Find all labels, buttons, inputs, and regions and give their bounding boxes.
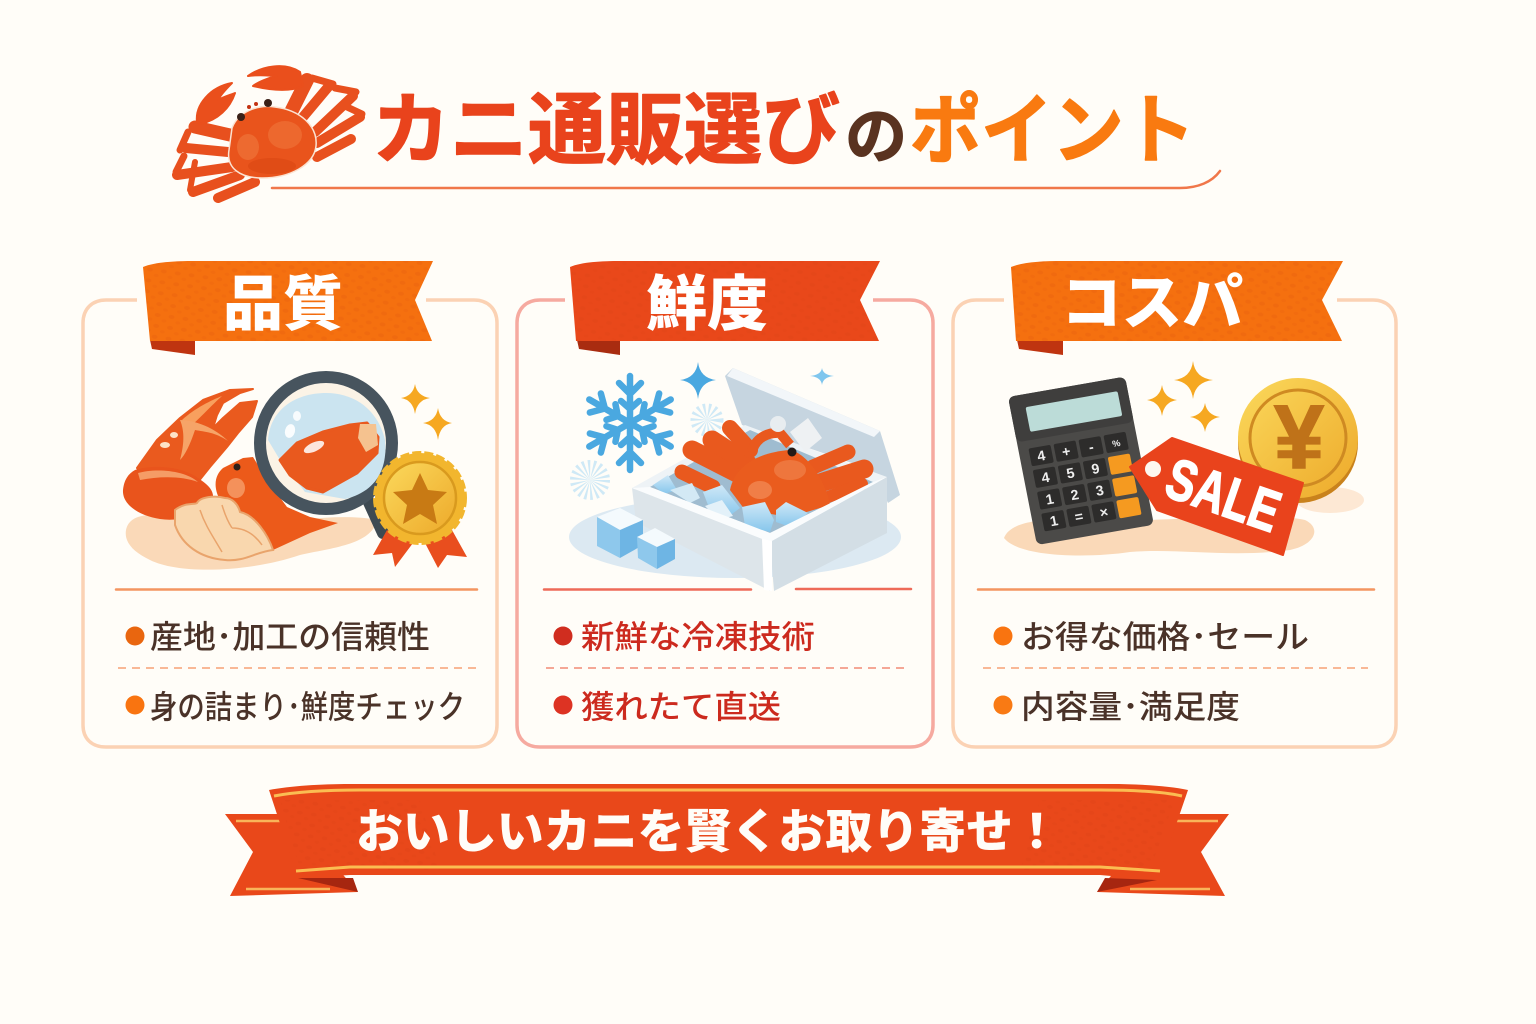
banner: value	[1011, 255, 1343, 355]
title	[372, 68, 1195, 180]
icon: calculator: 9	[1090, 460, 1101, 477]
big claw	[137, 389, 257, 482]
sparkles	[1147, 361, 1220, 432]
cold shadow	[569, 496, 901, 578]
ribbon body	[269, 784, 1188, 880]
box rim	[632, 477, 887, 542]
icon: yen coin: ¥	[1274, 388, 1324, 488]
ice back pieces	[790, 418, 822, 452]
sale tag: SALE	[1158, 446, 1289, 545]
box top	[632, 425, 887, 542]
divider: freshness	[544, 588, 911, 591]
box front left	[632, 488, 770, 591]
list item: meat fill and freshness: 身の詰まり･鮮度チェック	[150, 682, 465, 728]
ribbon gold lines	[274, 790, 1182, 871]
icon: calculator: 2	[1069, 486, 1080, 503]
box lid	[725, 368, 900, 503]
icon: calculator: 4	[1036, 447, 1047, 464]
icon: calculator: +	[1061, 443, 1072, 460]
list item: direct shipping: 獲れたて直送	[581, 682, 781, 728]
banner: value: コスパ	[1061, 255, 1243, 342]
icon: calculator: =	[1073, 508, 1085, 525]
panel frame: quality	[83, 300, 497, 747]
crab meat	[175, 497, 273, 560]
panel: freshness	[517, 256, 933, 747]
panel frame: freshness	[517, 300, 933, 747]
list item: freezing technology: 新鮮な冷凍技術	[581, 612, 815, 658]
icon: calculator: 3	[1094, 482, 1105, 499]
icon: calculator: %	[1111, 438, 1121, 449]
panel: value	[953, 255, 1396, 747]
crab leg and shell	[216, 457, 338, 550]
panel frame: value	[953, 300, 1396, 747]
icon: calculator: -	[1087, 439, 1095, 455]
ribbon tail left	[225, 814, 358, 896]
list item: origin and processing: 産地･加工の信頼性	[150, 612, 430, 658]
claw knuckle	[123, 467, 213, 520]
illustration: calculator, sale tag, yen coin	[1004, 361, 1364, 555]
ice pieces in box	[653, 475, 808, 532]
sand shadow	[1004, 516, 1314, 555]
divider: quality	[116, 588, 477, 591]
icon: calculator: 1	[1044, 490, 1055, 507]
illustration: cold box with crab and ice	[569, 362, 901, 591]
box front right	[770, 477, 887, 591]
title underline	[272, 171, 1220, 188]
banner: freshness	[570, 256, 880, 355]
illustration: crab claws under magnifier with medal	[123, 377, 467, 570]
magnifier	[260, 377, 392, 533]
medal	[373, 453, 467, 568]
divider: value	[978, 588, 1374, 591]
icon: crab	[176, 66, 362, 198]
title: の	[845, 86, 907, 176]
ice cubes	[597, 508, 675, 569]
keypad	[1028, 432, 1142, 531]
title: カニ通販選び	[372, 68, 840, 180]
faint frost circles	[580, 412, 715, 490]
title: ポイント	[910, 69, 1195, 179]
banner: quality: 品質	[223, 256, 343, 343]
banner: quality	[143, 256, 433, 355]
ribbon text: おいしいカニを賢くお取り寄せ！	[356, 793, 1060, 862]
box interior	[650, 430, 873, 533]
ribbon tail right	[1097, 814, 1229, 896]
sparkles	[401, 384, 452, 440]
icon: yen coin	[1238, 378, 1358, 503]
icon: calculator: 1	[1048, 512, 1059, 529]
list item: contents and satisfaction: 内容量･満足度	[1021, 682, 1240, 728]
icon: calculator	[1008, 377, 1154, 545]
panel: quality	[83, 256, 497, 747]
icon: calculator: 4	[1040, 469, 1051, 486]
icon: calculator: ×	[1098, 503, 1110, 521]
list item: bargain price: お得な価格･セール	[1021, 612, 1309, 658]
crab body	[730, 450, 830, 517]
icon: snowflake	[584, 376, 676, 470]
sand shadow	[126, 515, 377, 570]
sparkles	[680, 362, 716, 399]
banner: freshness: 鮮度	[646, 256, 768, 343]
crab legs	[682, 428, 864, 497]
sale tag	[1130, 438, 1303, 555]
bottom ribbon	[225, 784, 1229, 896]
icon: calculator: 5	[1065, 464, 1076, 481]
